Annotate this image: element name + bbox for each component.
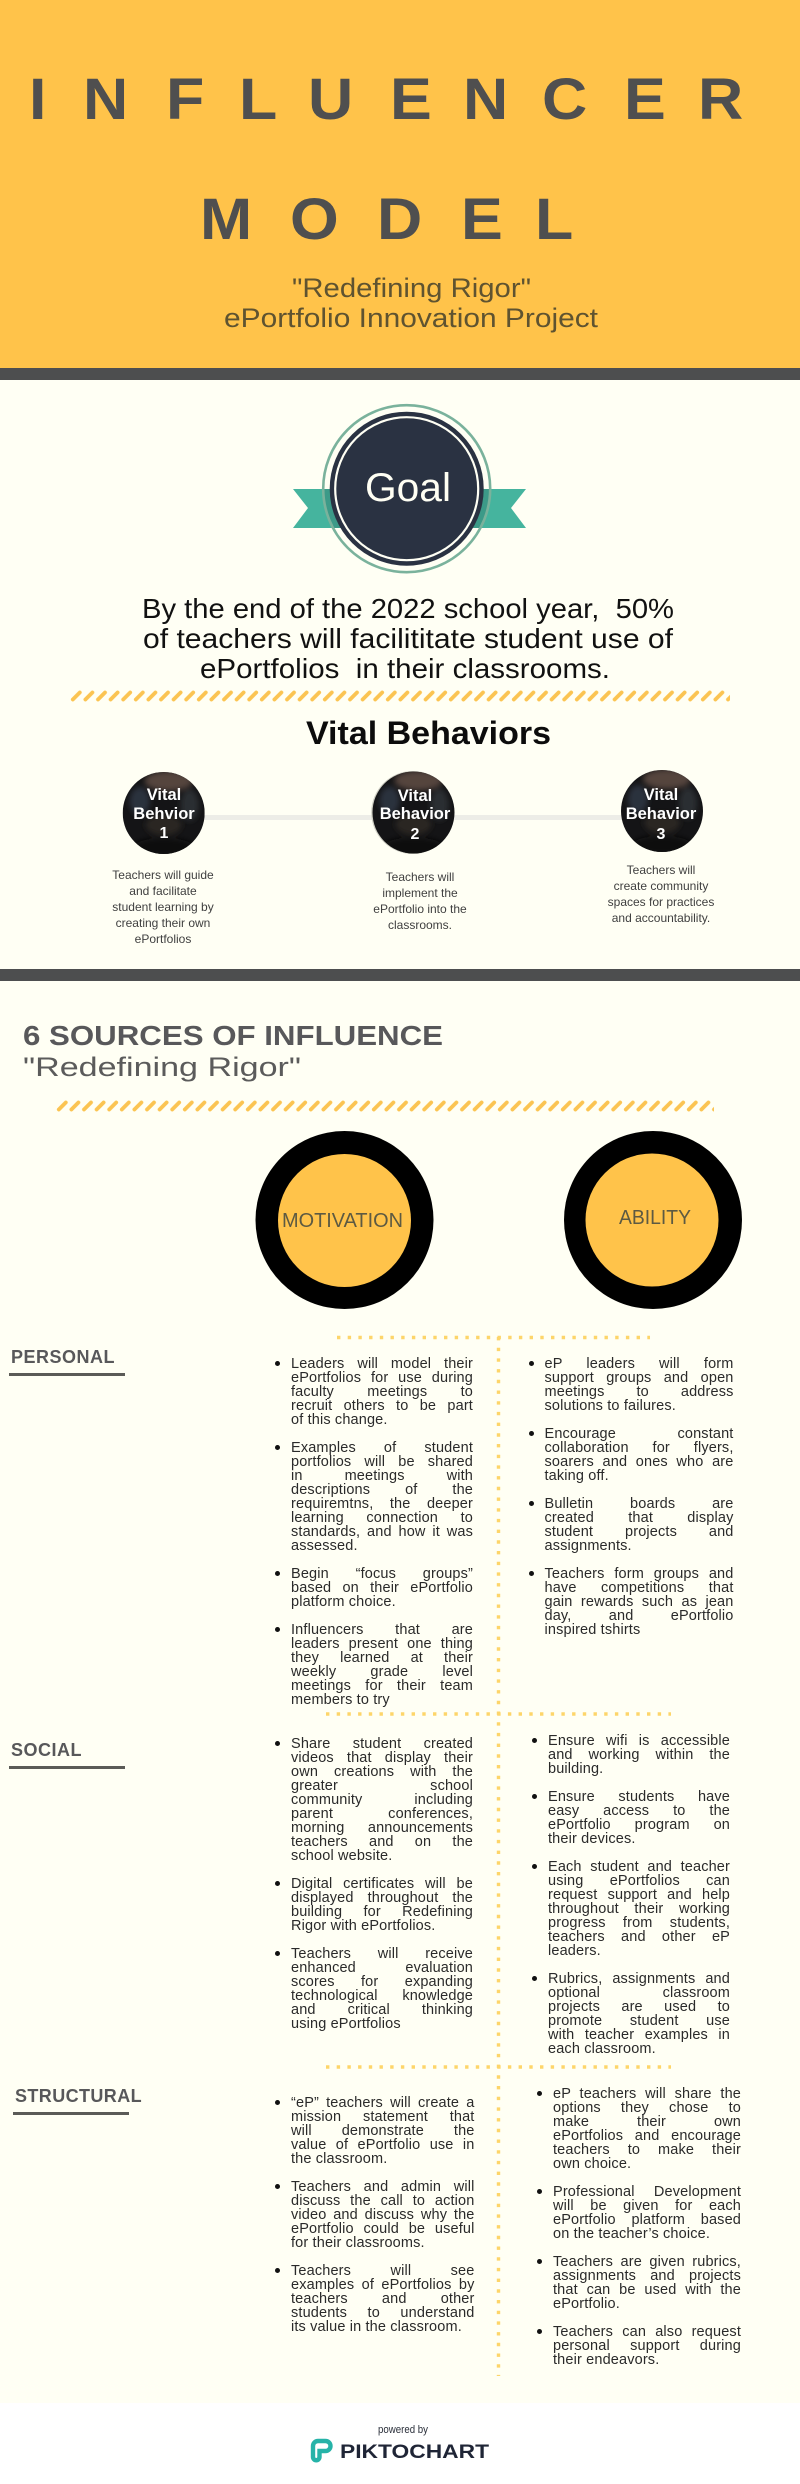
bullet: Teachers form groups and bbox=[544, 1566, 734, 1582]
dotted grid lines bbox=[326, 1336, 671, 2376]
title: MODEL bbox=[200, 186, 573, 250]
bullet: personal support during bbox=[553, 2338, 741, 2354]
subheading: "Redefining Rigor" bbox=[23, 1052, 301, 1082]
bullet: taking off. bbox=[544, 1468, 609, 1484]
bullet: portfolios will be shared bbox=[291, 1454, 473, 1470]
icon: motivation circle: MOTIVATION bbox=[282, 1210, 403, 1232]
bullet: Teachers will see bbox=[291, 2263, 474, 2279]
footer: powered by piktochart: PIKTOCHART bbox=[340, 2441, 489, 2463]
bullet: teachers to make their bbox=[553, 2142, 741, 2158]
bullet: discuss the call to action bbox=[291, 2193, 474, 2209]
bullet: Each student and teacher bbox=[548, 1859, 730, 1875]
bullet: Encourage constant bbox=[544, 1426, 734, 1442]
bullet: Rigor with ePortfolios. bbox=[291, 1918, 435, 1934]
social motivation list bbox=[275, 1736, 473, 2032]
bullet: scores for expanding bbox=[291, 1974, 473, 1990]
bullet: weekly grade level bbox=[291, 1664, 473, 1680]
bullet: own creations with the bbox=[291, 1764, 473, 1780]
bullet: Teachers will receive bbox=[291, 1946, 473, 1962]
circle 2: Behavior bbox=[380, 805, 451, 823]
circle 3: 3 bbox=[657, 826, 666, 843]
bullet: Teachers can also request bbox=[553, 2324, 741, 2340]
circle 3 bbox=[621, 769, 703, 854]
bullet: promote student use bbox=[548, 2013, 730, 2029]
bullet: day, and ePortfolio bbox=[544, 1608, 734, 1624]
circle 2 bbox=[371, 770, 454, 856]
bullet: ePortfolio. bbox=[553, 2296, 620, 2312]
label: social bbox=[9, 1740, 125, 1769]
bullet: building for Redefining bbox=[291, 1904, 473, 1920]
bullet: in meetings with bbox=[291, 1468, 473, 1484]
bullet bbox=[553, 2087, 741, 2171]
bullet bbox=[544, 1497, 734, 1553]
bullet: learning connection to bbox=[291, 1510, 473, 1526]
divider bar bbox=[0, 969, 800, 981]
vital behavior 1 text: and facilitate bbox=[129, 884, 197, 898]
icon: ability circle: ABILITY bbox=[619, 1207, 691, 1229]
circle 2: 2 bbox=[411, 826, 420, 843]
circle 1: Vital bbox=[147, 786, 181, 804]
bullet: Rubrics, assignments and bbox=[548, 1971, 730, 1987]
bullet: they learned at their bbox=[291, 1650, 473, 1666]
bullet bbox=[548, 1790, 730, 1846]
bullet: based on their ePortfolio bbox=[291, 1580, 473, 1596]
vital behavior 2 text: Teachers will bbox=[386, 870, 454, 884]
vital behavior 1 text: Teachers will guide bbox=[112, 868, 214, 882]
bullet: Influencers that are bbox=[291, 1622, 473, 1638]
bullet: on the teacher’s choice. bbox=[553, 2226, 710, 2242]
vital behavior 1 text: ePortfolios bbox=[135, 932, 191, 946]
bullet: “eP” teachers will create a bbox=[291, 2095, 474, 2111]
bullet: requiremtns, the deeper bbox=[291, 1496, 473, 1512]
bullet: support groups and open bbox=[544, 1370, 734, 1386]
bullet: mission statement that bbox=[291, 2109, 474, 2125]
bullet: displayed throughout the bbox=[291, 1890, 473, 1906]
bullet: make their own bbox=[553, 2114, 741, 2130]
bullet bbox=[291, 1441, 473, 1553]
bullet: using ePortfolios bbox=[291, 2016, 401, 2032]
bullet: Digital certificates will be bbox=[291, 1876, 473, 1892]
circle 3: Vital bbox=[644, 786, 678, 804]
bullet: eP teachers will share the bbox=[553, 2086, 741, 2102]
bullet: soarers and ones who are bbox=[544, 1454, 734, 1470]
title bbox=[29, 66, 743, 250]
bullet: students to understand bbox=[291, 2305, 474, 2321]
bullet: examples of ePortfolios by bbox=[291, 2277, 474, 2293]
vital behavior 3 text: spaces for practices bbox=[608, 895, 714, 909]
bullet: parent conferences, bbox=[291, 1806, 473, 1822]
bullet: of this change. bbox=[291, 1412, 388, 1428]
bullet: greater school bbox=[291, 1778, 473, 1794]
bullet: Bulletin boards are bbox=[544, 1496, 734, 1512]
vital behavior 1 text: creating their own bbox=[116, 916, 210, 930]
title: INFLUENCER bbox=[29, 66, 743, 131]
bullet bbox=[291, 1623, 473, 1707]
bullet: easy access to the bbox=[548, 1803, 730, 1819]
bullet: Ensure wifi is accessible bbox=[548, 1733, 730, 1749]
divider bar bbox=[0, 368, 800, 380]
bullet bbox=[291, 1567, 473, 1609]
bullet: value of ePortfolio use in bbox=[291, 2137, 474, 2153]
vital behavior 3 text: Teachers will bbox=[627, 863, 695, 877]
bullet: community including bbox=[291, 1792, 473, 1808]
bullet: request support and help bbox=[548, 1887, 730, 1903]
bullet: collaboration for flyers, bbox=[544, 1440, 734, 1456]
heading: vital behaviors: Vital Behaviors bbox=[306, 715, 551, 751]
vital behavior 2 text: ePortfolio into the bbox=[373, 902, 467, 916]
vital behavior 1 text: student learning by bbox=[112, 900, 214, 914]
vital behavior 2 text bbox=[373, 870, 467, 932]
bullet: Share student created bbox=[291, 1736, 473, 1752]
bullet: and working within the bbox=[548, 1747, 730, 1763]
label: structural: STRUCTURAL bbox=[15, 2086, 142, 2106]
vital behavior 3 text: and accountability. bbox=[612, 911, 710, 925]
bullet: using ePortfolios can bbox=[548, 1873, 730, 1889]
footer: powered by piktochart: powered by bbox=[378, 2424, 428, 2436]
bullet: projects are used to bbox=[548, 1999, 730, 2015]
bullet: teachers and other eP bbox=[548, 1929, 730, 1945]
bullet: descriptions of the bbox=[291, 1482, 473, 1498]
bullet: gain rewards such as jean bbox=[544, 1594, 734, 1610]
bullet: Professional Development bbox=[553, 2184, 741, 2200]
bullet bbox=[291, 1737, 473, 1863]
bullet: throughout their working bbox=[548, 1901, 730, 1917]
bullet: ePortfolios for use during bbox=[291, 1370, 473, 1386]
bullet: leaders. bbox=[548, 1943, 601, 1959]
label: personal: PERSONAL bbox=[11, 1347, 115, 1367]
circle 1 bbox=[123, 771, 205, 856]
bullet: technological knowledge bbox=[291, 1988, 473, 2004]
bullet: Teachers and admin will bbox=[291, 2179, 474, 2195]
bullet bbox=[553, 2185, 741, 2241]
vital behavior 2 text: classrooms. bbox=[388, 918, 452, 932]
personal ability list bbox=[529, 1356, 734, 1638]
structural ability list bbox=[537, 2086, 741, 2368]
bullet: Teachers are given rubrics, bbox=[553, 2254, 741, 2270]
bullet: options they chose to bbox=[553, 2100, 741, 2116]
bullet: own choice. bbox=[553, 2156, 631, 2172]
goal statement bbox=[142, 593, 674, 684]
bullet: assignments. bbox=[544, 1538, 632, 1554]
vital behavior 3 text bbox=[608, 863, 714, 925]
icon: goal badge bbox=[293, 404, 526, 574]
bullet: standards, and how it was bbox=[291, 1524, 473, 1540]
label: personal bbox=[9, 1347, 125, 1376]
bullet bbox=[291, 1877, 473, 1933]
circle 3: Behavior bbox=[626, 805, 697, 823]
subtitle: ePortfolio Innovation Project bbox=[224, 303, 599, 333]
bullet: progress from students, bbox=[548, 1915, 730, 1931]
vital behavior 2 text: implement the bbox=[382, 886, 458, 900]
bullet bbox=[544, 1357, 734, 1413]
heading: 6 sources of influence bbox=[23, 1020, 443, 1082]
bullet bbox=[291, 2096, 474, 2166]
structural motivation list bbox=[275, 2095, 474, 2335]
bullet bbox=[553, 2255, 741, 2311]
bullet: for their classrooms. bbox=[291, 2235, 425, 2251]
bullet: teachers and other bbox=[291, 2291, 474, 2307]
goal statement: of teachers will facilititate student use of bbox=[143, 623, 673, 654]
bullet: meetings for their team bbox=[291, 1678, 473, 1694]
subtitle bbox=[224, 273, 599, 333]
bullet: their devices. bbox=[548, 1831, 636, 1847]
goal statement: ePortfolios in their classrooms. bbox=[200, 653, 610, 684]
bullet bbox=[548, 1972, 730, 2056]
bullet: assessed. bbox=[291, 1538, 358, 1554]
social ability list bbox=[532, 1733, 730, 2057]
bullet: teachers and on the bbox=[291, 1834, 473, 1850]
bullet: will be given for each bbox=[553, 2198, 741, 2214]
bullet: recruit others to be part bbox=[291, 1398, 473, 1414]
bullet: its value in the classroom. bbox=[291, 2319, 462, 2335]
bullet: building. bbox=[548, 1761, 603, 1777]
bullet: platform choice. bbox=[291, 1594, 396, 1610]
bullet: ePortfolio program on bbox=[548, 1817, 730, 1833]
bullet: the classroom. bbox=[291, 2151, 387, 2167]
bullet: Examples of student bbox=[291, 1440, 473, 1456]
bullet: Ensure students have bbox=[548, 1789, 730, 1805]
bullet: ePortfolio platform based bbox=[553, 2212, 741, 2228]
vital behavior 3 text: create community bbox=[614, 879, 708, 893]
circle 2: Vital bbox=[398, 787, 432, 805]
goal statement: By the end of the 2022 school year, 50% bbox=[142, 593, 674, 624]
bullet: leaders present one thing bbox=[291, 1636, 473, 1652]
bullet bbox=[548, 1860, 730, 1958]
bullet: inspired tshirts bbox=[544, 1622, 640, 1638]
bullet: school website. bbox=[291, 1848, 392, 1864]
bullet: and critical thinking bbox=[291, 2002, 473, 2018]
footer: powered by piktochart bbox=[310, 2424, 489, 2463]
hatched divider bbox=[56, 1100, 714, 1112]
bullet: eP leaders will form bbox=[544, 1356, 734, 1372]
circle 1: 1 bbox=[160, 825, 169, 842]
bullet: morning announcements bbox=[291, 1820, 473, 1836]
icon: motivation circle bbox=[256, 1131, 434, 1309]
bullet: that can be used with the bbox=[553, 2282, 741, 2298]
bullet bbox=[548, 1734, 730, 1776]
bullet: optional classroom bbox=[548, 1985, 730, 2001]
panel: header bbox=[0, 0, 800, 380]
bullet: ePortfolios and encourage bbox=[553, 2128, 741, 2144]
bullet: members to try bbox=[291, 1692, 390, 1708]
goal label: Goal bbox=[365, 466, 451, 510]
bullet: meetings to address bbox=[544, 1384, 734, 1400]
bullet bbox=[291, 2264, 474, 2334]
bullet: Leaders will model their bbox=[291, 1356, 473, 1372]
bullet bbox=[544, 1567, 734, 1637]
bullet: student projects and bbox=[544, 1524, 734, 1540]
bullet: assignments and projects bbox=[553, 2268, 741, 2284]
bullet: faculty meetings to bbox=[291, 1384, 473, 1400]
bullet: have competitions that bbox=[544, 1580, 734, 1596]
bullet: ePortfolio could be useful bbox=[291, 2221, 474, 2237]
bullet: their endeavors. bbox=[553, 2352, 659, 2368]
connector line bbox=[200, 815, 630, 820]
bullet bbox=[291, 1947, 473, 2031]
bullet: Begin “focus groups” bbox=[291, 1566, 473, 1582]
bullet: will demonstrate the bbox=[291, 2123, 474, 2139]
bullet bbox=[553, 2325, 741, 2367]
vital behavior 1 text bbox=[112, 868, 214, 946]
icon: ability circle bbox=[564, 1131, 742, 1309]
bullet: video and discuss why the bbox=[291, 2207, 474, 2223]
icon: piktochart logo bbox=[313, 2441, 330, 2460]
label: social: SOCIAL bbox=[11, 1740, 82, 1760]
bullet: solutions to failures. bbox=[544, 1398, 676, 1414]
label: structural bbox=[13, 2086, 142, 2115]
heading: 6 sources of influence: 6 SOURCES OF INFLUENCE bbox=[23, 1020, 443, 1051]
hatched divider bbox=[70, 690, 730, 702]
bullet bbox=[291, 1357, 473, 1427]
bullet bbox=[544, 1427, 734, 1483]
bullet: enhanced evaluation bbox=[291, 1960, 473, 1976]
bullet: videos that display their bbox=[291, 1750, 473, 1766]
circle 1: Behvior bbox=[133, 805, 195, 823]
bullet: with teacher examples in bbox=[548, 2027, 730, 2043]
subtitle: "Redefining Rigor" bbox=[292, 273, 531, 303]
bullet: each classroom. bbox=[548, 2041, 656, 2057]
bullet: created that display bbox=[544, 1510, 734, 1526]
personal motivation list bbox=[275, 1356, 473, 1708]
bullet bbox=[291, 2180, 474, 2250]
icon: vital behavior circles bbox=[122, 770, 703, 854]
